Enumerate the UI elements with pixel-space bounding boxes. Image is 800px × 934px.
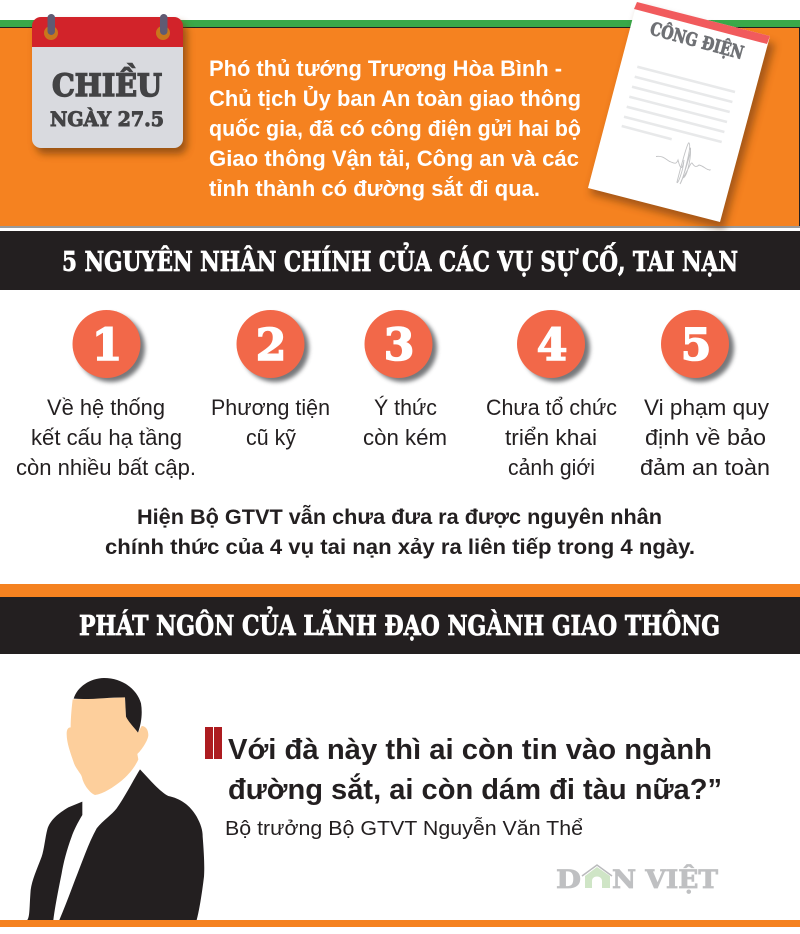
text block: intro: Phó thủ tướng Trương Hòa Bình - — [209, 56, 562, 81]
cause 3: 3 — [384, 320, 414, 371]
text block: intro: tỉnh thành có đường sắt đi qua. — [209, 176, 540, 201]
text block: intro: quốc gia, đã có công điện gửi hai bộ — [209, 116, 581, 141]
cause 4: Chưa tổ chức — [486, 395, 617, 420]
cause 5: đảm an toàn — [640, 455, 770, 480]
document title: CÔNG ĐIỆN — [648, 17, 746, 64]
quote text — [228, 734, 722, 806]
cause 1: 1 — [92, 320, 122, 371]
cause 1: kết cấu hạ tầng — [31, 425, 182, 450]
calendar text — [50, 62, 164, 131]
quote text: đường sắt, ai còn dám đi tàu nữa?” — [228, 772, 722, 806]
cause 4: triển khai — [505, 425, 597, 450]
signature — [656, 143, 710, 184]
cause 1: còn nhiều bất cập. — [16, 455, 196, 480]
icon: calendar — [32, 14, 187, 154]
calendar text: NGÀY 27.5 — [50, 107, 164, 131]
quote mark — [205, 727, 222, 759]
cause 3 — [363, 310, 447, 450]
cause 1 — [16, 310, 196, 480]
cause 4 — [486, 310, 617, 480]
cause 3: Ý thức — [374, 395, 437, 420]
cause 5: 5 — [681, 320, 711, 371]
text block: cause statement — [105, 504, 695, 559]
cause 2: Phương tiện — [211, 395, 330, 420]
heading: five causes — [0, 231, 800, 290]
heading: leader statement — [0, 584, 800, 654]
logo: Dan Viet — [556, 865, 718, 894]
quote attribution: Bộ trưởng Bộ GTVT Nguyễn Văn Thể — [225, 817, 583, 840]
cause 4: 4 — [537, 320, 567, 371]
panel: orange header — [0, 20, 800, 228]
cause 4: cảnh giới — [508, 455, 595, 480]
cause 3: còn kém — [363, 425, 447, 450]
quote text: Với đà này thì ai còn tin vào ngành — [228, 734, 712, 766]
logo: Dan Viet: N VIỆT — [612, 865, 718, 894]
icon: telegram document — [588, 2, 775, 230]
document lines — [622, 67, 735, 142]
cause 1: Về hệ thống — [47, 395, 165, 420]
cause 5: Vi phạm quy — [644, 395, 770, 420]
cause 2 — [211, 310, 330, 450]
text block: intro: Giao thông Vận tải, Công an và các — [209, 146, 579, 171]
logo: Dan Viet: D — [556, 865, 581, 894]
cause 2: cũ kỹ — [246, 425, 297, 450]
cause 2: 2 — [256, 320, 286, 371]
text block: cause statement: Hiện Bộ GTVT vẫn chưa đưa ra được nguyên nhân — [137, 504, 662, 529]
cause 5: định về bảo — [645, 425, 766, 450]
text block: intro — [209, 56, 581, 201]
icon: minister silhouette — [27, 678, 204, 920]
cause 5 — [640, 310, 770, 480]
footer bar — [0, 920, 800, 927]
calendar text: CHIỀU — [52, 62, 162, 104]
text block: intro: Chủ tịch Ủy ban An toàn giao thông — [209, 86, 581, 111]
text block: cause statement: chính thức của 4 vụ tai nạn xảy ra liên tiếp trong 4 ngày. — [105, 535, 695, 559]
